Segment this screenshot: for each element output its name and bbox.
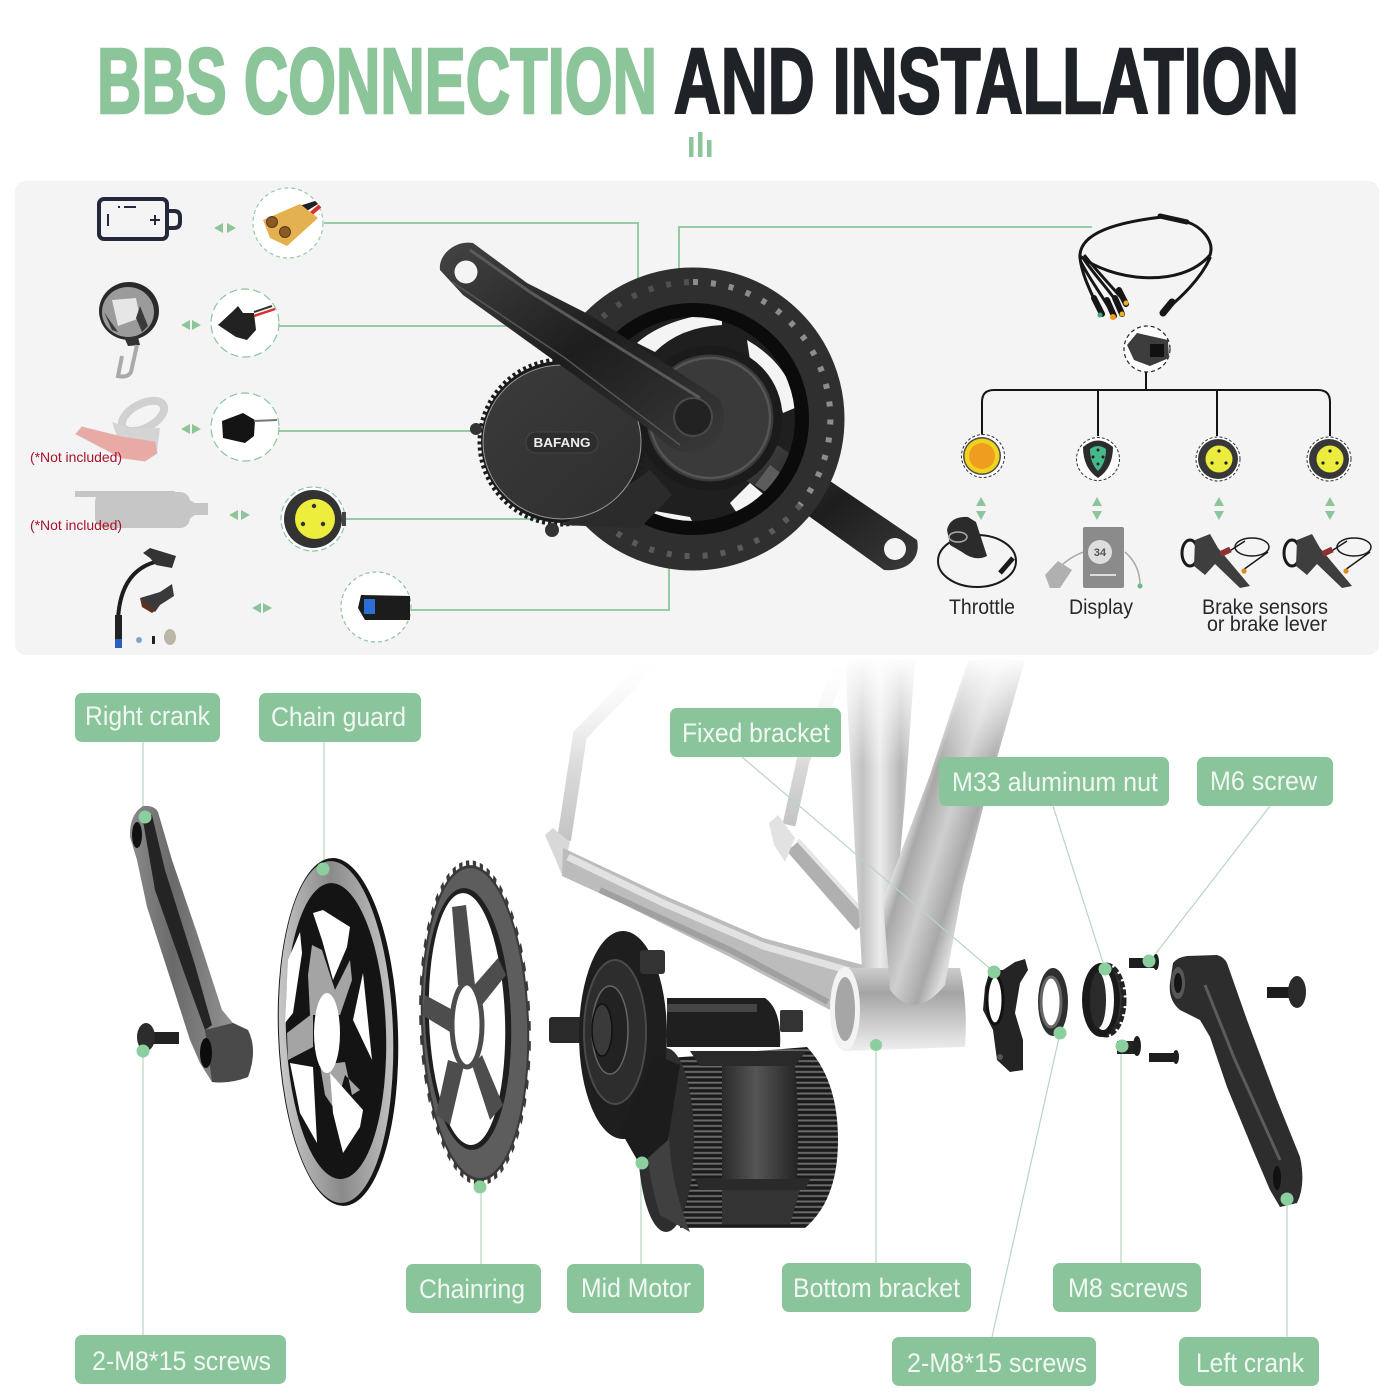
part: right crank	[130, 806, 253, 1082]
label: 2-M8*15 screws right	[892, 1337, 1096, 1386]
shaft	[549, 1017, 587, 1043]
not included note: tail light: (*Not included)	[30, 449, 122, 465]
label: 2-M8*15 screws left	[75, 1335, 286, 1384]
seat tube	[845, 660, 915, 968]
label: M33 aluminum nut: M33 aluminum nut	[952, 767, 1158, 797]
spider windows	[637, 312, 797, 523]
title accent bars	[689, 132, 712, 157]
fin drum	[670, 1047, 838, 1228]
connector: brake left	[1196, 437, 1240, 481]
connector: brake right	[1307, 437, 1351, 481]
label: 2-M8*15 screws right: 2-M8*15 screws	[907, 1348, 1087, 1378]
icon: tail light faded	[76, 395, 169, 461]
rear cylinder	[667, 998, 780, 1047]
part: crank bolt right	[1267, 976, 1306, 1008]
guard spider silver	[287, 945, 360, 1110]
label: right crank	[75, 693, 220, 742]
label: chain guard	[259, 693, 421, 742]
panel: wiring connection diagram	[15, 181, 1379, 655]
part: aluminum ring nut	[1082, 963, 1124, 1037]
caption: brake sensors: Brake sensors	[1202, 596, 1328, 619]
label: M6 screw	[1197, 757, 1333, 806]
label: M6 screw: M6 screw	[1210, 766, 1317, 796]
motor cover	[483, 365, 641, 519]
arrows: battery	[214, 223, 236, 233]
part: chain guard	[272, 856, 404, 1208]
caption: brake sensors: or brake lever	[1207, 613, 1327, 636]
icon: brake lever left	[1182, 534, 1269, 588]
label: left crank	[1179, 1337, 1319, 1386]
label: chainring	[406, 1264, 541, 1313]
chain guard ring	[560, 286, 826, 552]
leader lines	[143, 742, 1287, 1337]
label: right crank: Right crank	[85, 701, 210, 731]
icon: headlight	[99, 282, 159, 376]
part: bolt left	[137, 1023, 179, 1051]
lower crank arm	[745, 440, 918, 570]
label: M33 aluminum nut	[939, 757, 1169, 806]
connector: tail light plug	[211, 393, 279, 461]
icon: throttle	[938, 517, 1016, 587]
icon: battery bottle faded	[75, 491, 208, 528]
label: M8 screws	[1053, 1263, 1201, 1312]
upper crank arm	[440, 243, 724, 453]
upper tube fade	[540, 655, 1040, 765]
connector: harness plug	[1124, 326, 1170, 372]
icon: battery	[99, 199, 180, 239]
caption: display: Display	[1069, 596, 1133, 619]
spider backing	[583, 309, 803, 529]
seat stays	[564, 660, 653, 840]
label: left crank: Left crank	[1196, 1348, 1304, 1378]
hub disc	[642, 350, 778, 486]
label: chain guard: Chain guard	[271, 702, 406, 732]
motor end cap	[638, 1048, 694, 1232]
part: chainring	[416, 863, 534, 1183]
chain stay	[562, 848, 885, 1010]
branch lines	[982, 372, 1330, 436]
label: fixed bracket	[670, 708, 841, 757]
motor toothed rim	[481, 361, 643, 523]
icon: brake lever right	[1284, 534, 1371, 588]
marker dots	[136, 810, 1294, 1206]
bicycle frame	[540, 655, 1040, 1051]
guard windows	[285, 910, 372, 1153]
part: left crank	[1170, 955, 1302, 1207]
title: BBS CONNECTION	[97, 29, 657, 133]
label: mid motor: Mid Motor	[581, 1273, 691, 1303]
label: bottom bracket	[782, 1263, 971, 1312]
caption: brake sensors	[1202, 596, 1328, 636]
arrows: tail light	[181, 424, 201, 434]
label: chainring: Chainring	[419, 1274, 525, 1304]
connector: headlight plug	[211, 289, 279, 357]
dropouts	[545, 828, 570, 875]
chainring spider arms	[422, 905, 506, 1125]
BAFANG logo: BAFANG	[534, 435, 590, 450]
rear stay upper	[793, 846, 862, 925]
icon: display: 34	[1094, 547, 1107, 559]
part: fixed bracket	[983, 959, 1028, 1072]
part: small screws	[1117, 954, 1179, 1064]
label: mid motor	[567, 1264, 704, 1313]
connector: blue plug	[341, 572, 411, 642]
mid-drive motor assembled	[440, 243, 918, 570]
up-down arrows	[976, 497, 1335, 520]
caption: throttle: Throttle	[949, 596, 1015, 619]
label: M8 screws: M8 screws	[1068, 1273, 1188, 1303]
label: fixed bracket: Fixed bracket	[682, 718, 830, 748]
wiring harness	[1080, 216, 1211, 320]
label: 2-M8*15 screws left: 2-M8*15 screws	[92, 1346, 271, 1376]
label: bottom bracket: Bottom bracket	[793, 1273, 960, 1303]
not included note: battery: (*Not included)	[30, 517, 122, 533]
mount plate	[579, 931, 667, 1139]
arrows: second battery	[229, 510, 250, 520]
arrows: speed sensor	[252, 603, 272, 613]
green connector lines	[279, 223, 1092, 610]
BAFANG logo	[526, 432, 598, 453]
part: mid motor	[549, 931, 838, 1232]
icon: display	[1045, 527, 1142, 588]
connector: display	[1076, 438, 1120, 480]
connector: yellow three-pin	[281, 487, 346, 551]
down tube	[883, 660, 1025, 1005]
connector: throttle	[962, 434, 1004, 478]
connector: XT60 battery plug	[253, 188, 323, 258]
bottom bracket shell	[845, 968, 966, 1051]
drum smooth bands	[722, 1066, 798, 1179]
icon: speed sensor kit	[115, 548, 176, 648]
part: lock nut	[1038, 968, 1068, 1036]
arrows: headlight	[181, 320, 201, 330]
